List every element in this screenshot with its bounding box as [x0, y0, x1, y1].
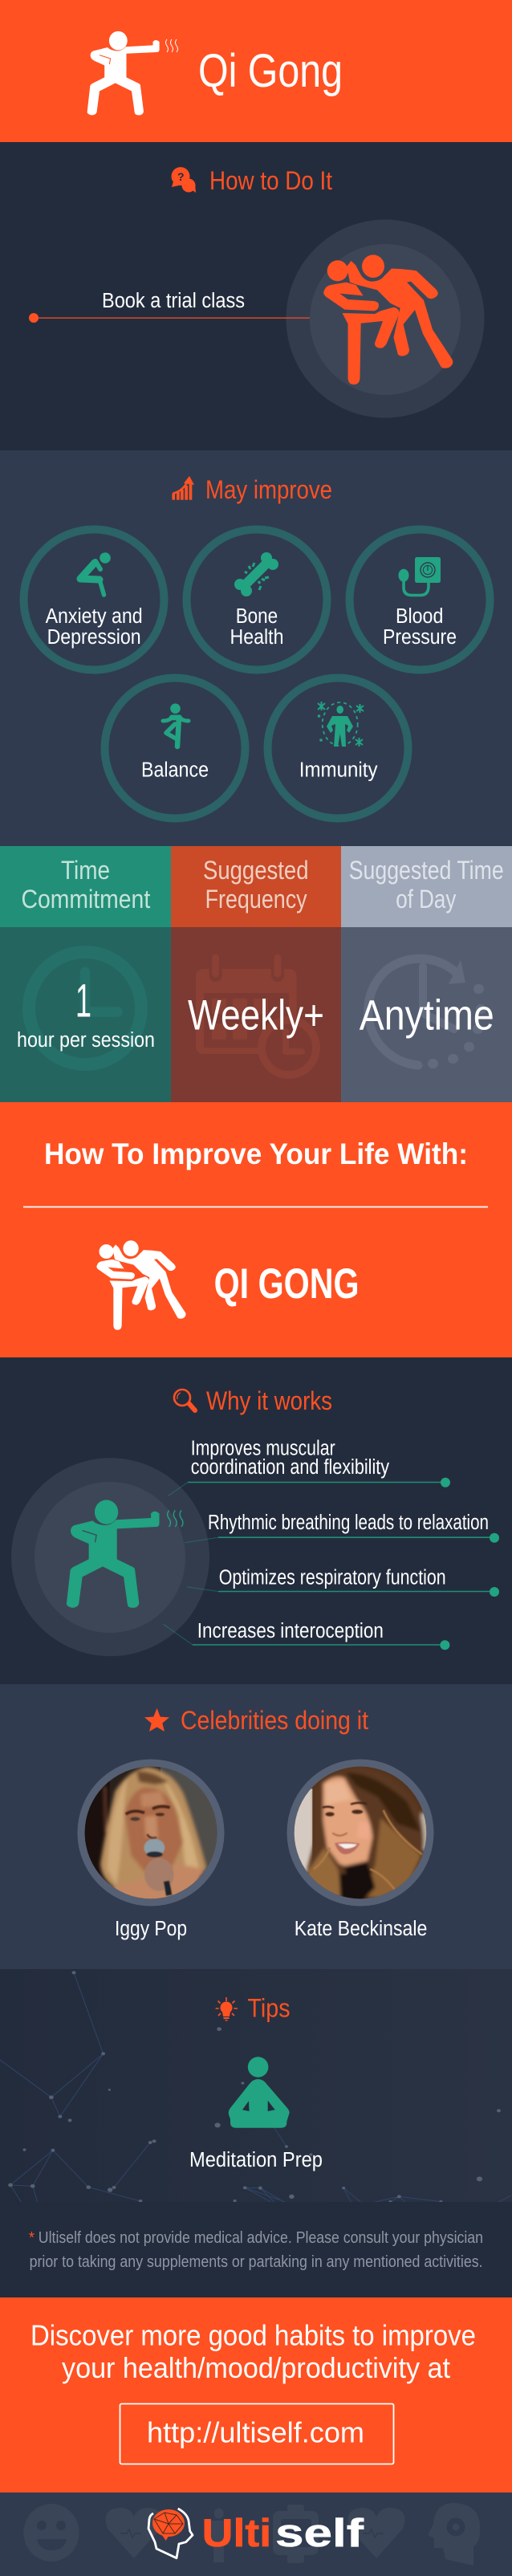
panel: title header: [0, 0, 512, 142]
icon: star: [144, 1708, 169, 1732]
item: anxiety and depression: [24, 530, 164, 669]
item: bone health: [186, 530, 327, 669]
logo: ultiself: [148, 2509, 364, 2558]
panel: time commitment: 1: [75, 975, 91, 1028]
panel: time commitment: hour per session: [17, 1029, 155, 1052]
icon: teal qi gong figure: [67, 1500, 183, 1608]
portrait: kate beckinsale: [287, 1760, 433, 1940]
panel: time commitment: Time: [61, 856, 110, 885]
icon: blood pressure cuff: [398, 557, 441, 596]
heading: how to do it: How to Do It: [209, 166, 332, 195]
panel: suggested time of day: of Day: [396, 885, 456, 914]
item: bone health: Health: [230, 626, 284, 649]
icon: head with brain: [148, 2509, 193, 2558]
icon: two person qi gong white: [96, 1240, 186, 1330]
icon: meditating figure: [229, 2057, 290, 2128]
icon: magnifier: [174, 1390, 195, 1410]
panel: suggested time of day: [341, 846, 512, 1102]
button: website: [120, 2403, 393, 2464]
item: immunity: [268, 678, 408, 819]
icon: protected person: [318, 702, 364, 747]
item: blood pressure: [350, 530, 490, 669]
title: Qi Gong: [198, 45, 343, 97]
panel: suggested time of day: Anytime: [360, 992, 494, 1040]
item: blood pressure: Pressure: [383, 626, 457, 649]
reason 2: [185, 1512, 499, 1543]
icon: bone: [234, 552, 278, 596]
icon: clock with circular arrow: [368, 958, 482, 1065]
logo: ultiself: self: [275, 2512, 364, 2555]
icon: qi gong figure: [87, 31, 178, 116]
panel: celebrities doing it: [0, 1684, 512, 1969]
call to action text: [30, 2319, 476, 2384]
item: immunity: Immunity: [299, 759, 378, 782]
reason 1: coordination and flexibility: [191, 1456, 389, 1479]
reason 1: Improves muscular: [191, 1438, 335, 1460]
icon: tree pose: [163, 703, 189, 747]
item: anxiety and depression: Anxiety and: [46, 605, 143, 628]
banner heading: How To Improve Your Life With:: [44, 1137, 468, 1170]
item: balance: [104, 678, 246, 819]
heading: why it works: Why it works: [206, 1386, 332, 1415]
reason 3: [187, 1566, 499, 1597]
item: bone health: Bone: [236, 605, 278, 628]
portrait: iggy pop: [77, 1760, 225, 1940]
heading: may improve: May improve: [205, 475, 332, 504]
icon: question bubbles: ?: [177, 170, 185, 183]
button: website: http://ultiself.com: [147, 2416, 364, 2449]
heading: tips: Tips: [247, 1994, 291, 2023]
diagram: qi gong figure in circles: [11, 1458, 209, 1656]
panel: how to do it: [0, 142, 512, 450]
heading: how to do it: [172, 166, 332, 195]
panel: time commitment: [0, 846, 171, 1102]
panel: footer logo: [0, 2493, 512, 2576]
reason 4: [164, 1620, 449, 1650]
disclaimer: [29, 2229, 483, 2271]
icon: light bulb: [216, 1997, 238, 2021]
heading: tips: [216, 1994, 291, 2023]
panel: tips: [0, 1969, 512, 2297]
panel: suggested frequency: [171, 846, 341, 1102]
icon: question bubbles: [172, 167, 196, 193]
banner activity name: QI GONG: [214, 1260, 360, 1308]
reason 1: [169, 1438, 450, 1496]
icon: clock: [29, 952, 141, 1064]
call to action text: Discover more good habits to improve: [30, 2319, 476, 2352]
step: book a trial class: [29, 290, 310, 323]
item: anxiety and depression: Depression: [47, 626, 141, 649]
item: blood pressure: Blood: [396, 605, 443, 628]
panel: why it works: [0, 1357, 512, 1684]
panel: may improve: [0, 450, 512, 846]
reason 3: Optimizes respiratory function: [219, 1566, 446, 1589]
panel: suggested frequency: Frequency: [205, 885, 307, 914]
panel: suggested frequency: Weekly+: [188, 992, 324, 1040]
step: book a trial class: Book a trial class: [102, 290, 245, 312]
panel: how to improve banner: [0, 1102, 512, 1357]
icon: seated thinker: [80, 552, 111, 595]
tip: meditation prep: Meditation Prep: [189, 2149, 323, 2171]
portrait: iggy pop: Iggy Pop: [115, 1918, 187, 1940]
reason 4: Increases interoception: [197, 1620, 384, 1642]
heading: celebrities: Celebrities doing it: [181, 1706, 368, 1735]
panel: suggested frequency: Suggested: [203, 856, 308, 885]
diagram: step with concentric circles: [286, 220, 485, 417]
icon: two person qi gong: [323, 254, 453, 385]
panel: call to action: [0, 2297, 512, 2493]
portrait: kate beckinsale: Kate Beckinsale: [295, 1918, 427, 1940]
panel: time commitment: Commitment: [21, 885, 150, 914]
tip: meditation prep: [189, 2057, 323, 2171]
call to action text: your health/mood/productivity at: [62, 2351, 450, 2384]
icon: rising chart: [172, 476, 194, 500]
wordmark: Ulti: [202, 2512, 271, 2555]
icon: calendar and clock: [196, 958, 316, 1075]
item: balance: Balance: [141, 759, 209, 782]
